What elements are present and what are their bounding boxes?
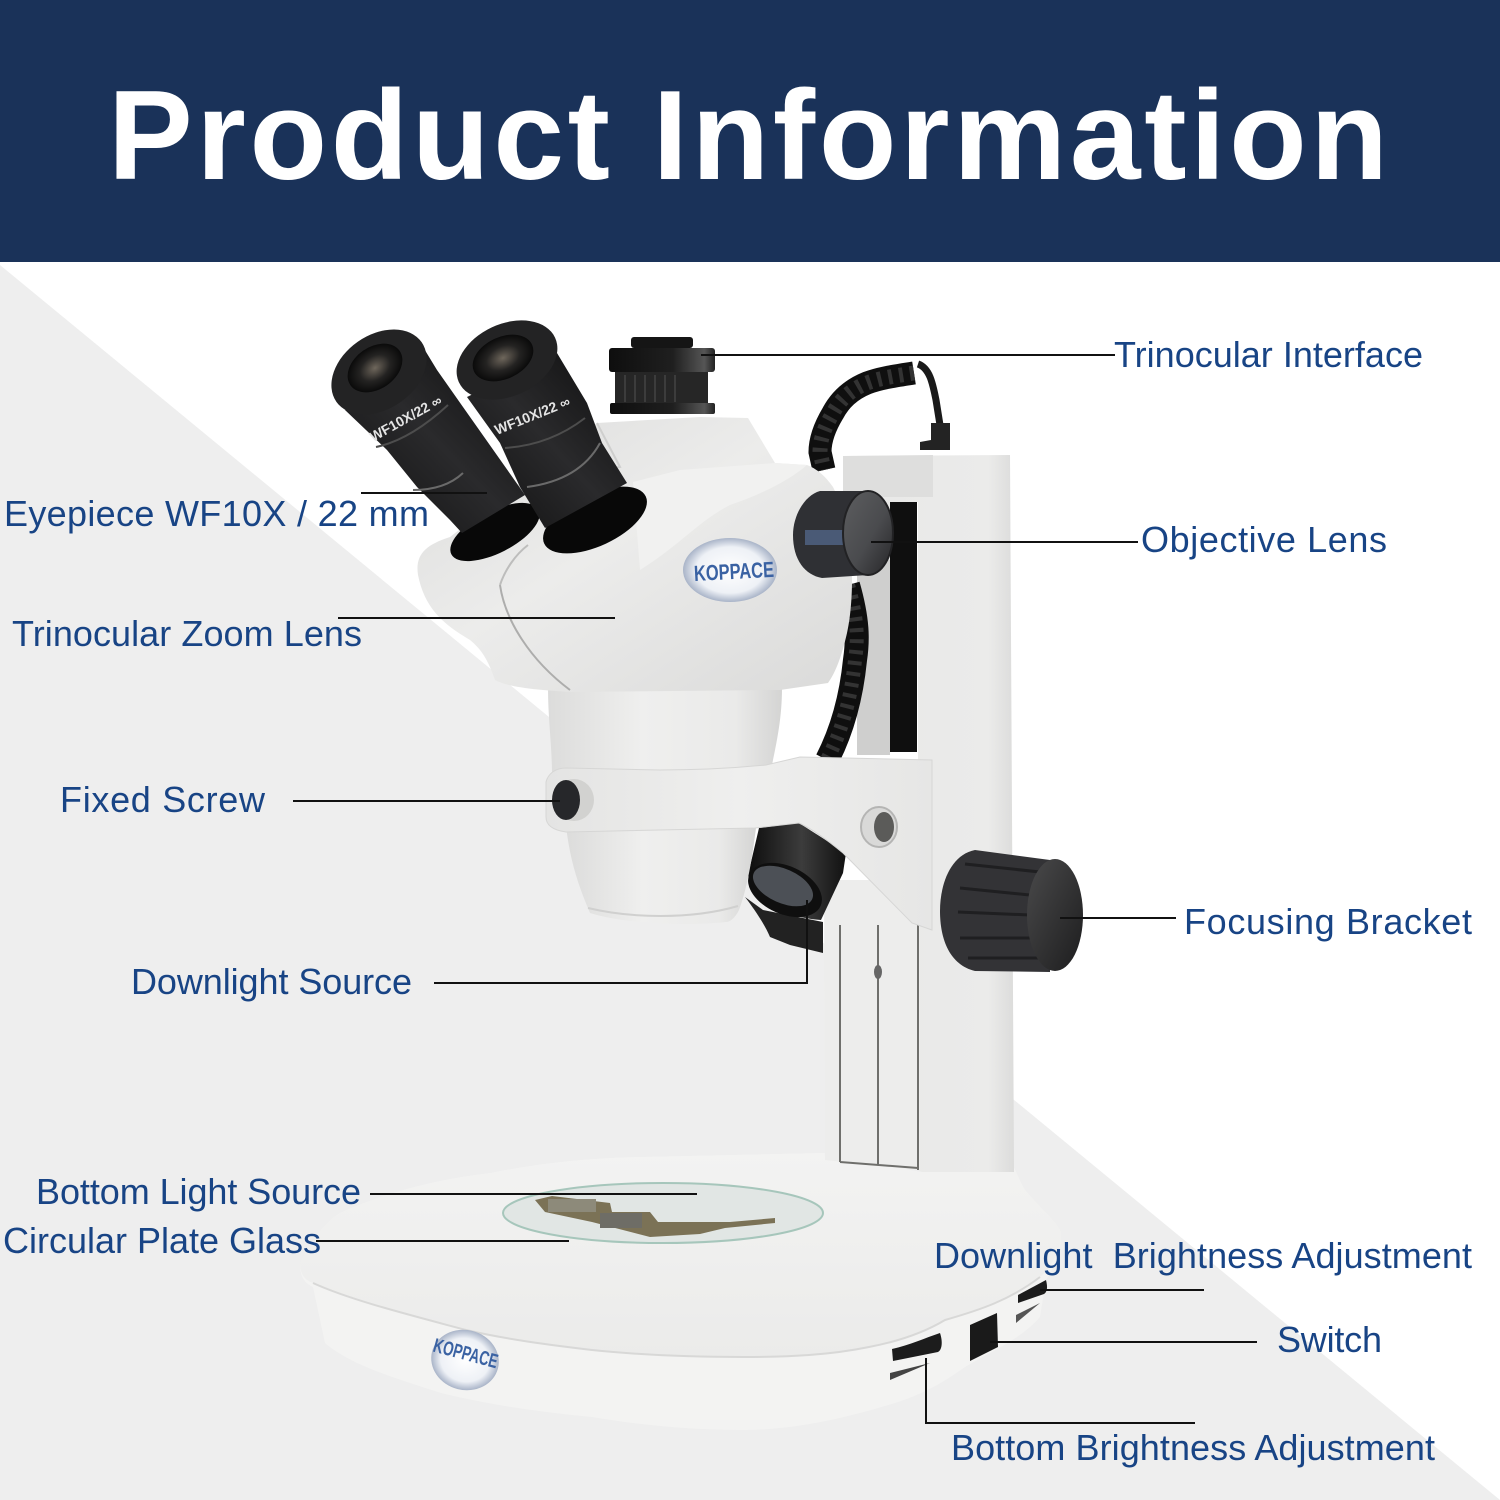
zoom tube: [548, 688, 782, 924]
leader lines: [293, 355, 1257, 1423]
title banner: [0, 0, 1500, 262]
microscope head: [417, 417, 852, 692]
base: [300, 1153, 1061, 1430]
coiled cable: [820, 364, 950, 760]
brand badge: KOPPACE: [693, 557, 775, 586]
label: Trinocular Interface: Trinocular Interface: [1114, 334, 1423, 375]
left eyepiece: [315, 312, 548, 573]
label: Trinocular Zoom Lens: Trinocular Zoom Lens: [12, 613, 362, 654]
microscope illustration: [300, 305, 1083, 1430]
label: Fixed Screw: Fixed Screw: [60, 779, 266, 820]
trinocular port: [609, 337, 715, 414]
title: Product Information: [108, 64, 1388, 206]
glass plate: [503, 1183, 823, 1243]
brand badge: [683, 538, 777, 602]
label: Objective Lens: Objective Lens: [1141, 519, 1387, 560]
label: Downlight Brightness Adjustment: Downlight Brightness Adjustment: [934, 1235, 1472, 1276]
label: Circular Plate Glass: Circular Plate Glass: [3, 1220, 321, 1261]
base badge: KOPPACE: [431, 1335, 500, 1373]
column stand: [824, 455, 1014, 1172]
right eyepiece: WF10X/22 ∞: [492, 393, 572, 438]
label: Bottom Light Source: Bottom Light Source: [36, 1171, 361, 1212]
label: Focusing Bracket: Focusing Bracket: [1184, 901, 1472, 942]
label: Downlight Source: Downlight Source: [131, 961, 412, 1002]
silver screw: [861, 807, 897, 847]
base badge: [425, 1323, 505, 1397]
label: Bottom Brightness Adjustment: Bottom Brightness Adjustment: [951, 1427, 1435, 1468]
fixed screw: [552, 779, 594, 821]
objective knob: [793, 491, 893, 578]
label: Eyepiece: Eyepiece WF10X / 22 mm: [4, 493, 429, 534]
brightness wheels and switch: [890, 1280, 1047, 1380]
arm bracket: [546, 757, 932, 930]
label: Switch: Switch: [1277, 1319, 1382, 1360]
focusing knob: [940, 850, 1083, 972]
down light: [740, 823, 846, 953]
left eyepiece: WF10X/22 ∞: [367, 392, 444, 445]
right eyepiece: [444, 305, 657, 567]
